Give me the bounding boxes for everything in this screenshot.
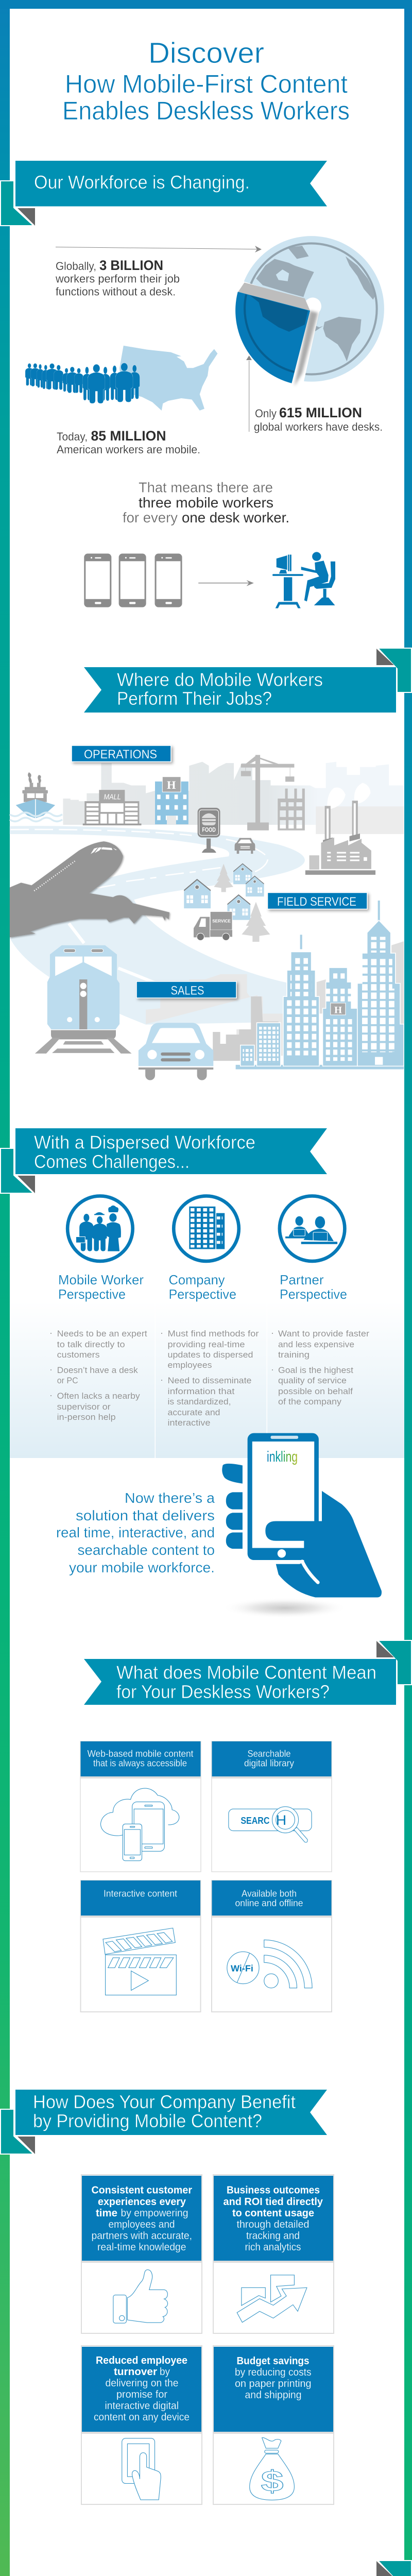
- text: three mobile workers: one desk worker.: [182, 510, 289, 526]
- ribbon: With a Dispersed Workforce: With a Dispersed Workforce: [34, 1131, 255, 1153]
- icon: food sign: [198, 808, 220, 853]
- icon: mall: [83, 790, 141, 825]
- card: reduced employee turnover: content on any device: [94, 2412, 190, 2423]
- card: interactive content: Interactive content: [104, 1889, 177, 1899]
- text: company bullets: employees: [168, 1360, 212, 1370]
- text: solution statement: your mobile workforce.: [69, 1560, 215, 1575]
- icon: skyscrapers: [236, 901, 404, 1070]
- card: business outcomes and ROI: and ROI tied directly: [224, 2196, 323, 2208]
- text: 85 million: 85 MILLION: [91, 428, 166, 444]
- heading: partner perspective: [280, 1272, 347, 1302]
- card: available online and offline: Wi-Fi: [231, 1963, 253, 1974]
- text: mobile worker bullets: to talk directly to: [57, 1340, 125, 1349]
- card: reduced employee turnover: turnover: [114, 2366, 157, 2378]
- ribbon: What does Mobile Content Mean: for Your Deskless Workers?: [116, 1681, 330, 1702]
- card: business outcomes and ROI: through detailed: [237, 2219, 309, 2230]
- text: 3 billion workers: Globally,: [56, 260, 96, 273]
- text: mobile worker bullets: [50, 1329, 147, 1422]
- text: 615 million: global workers have desks.: [254, 420, 383, 433]
- illustration: where mobile workers perform jobs: [10, 755, 404, 1025]
- card: budget savings: Budget savings: [237, 2355, 309, 2367]
- city skyline backdrop: [63, 762, 404, 834]
- text: partner bullets: training: [278, 1350, 310, 1360]
- text: 3 billion workers: 3 BILLION: [99, 258, 163, 273]
- text: 85 million: American workers are mobile.: [57, 443, 200, 456]
- card: searchable digital library: [212, 1741, 332, 1872]
- icon: airplane: [10, 841, 169, 937]
- card: business outcomes and ROI: rich analytics: [245, 2242, 301, 2253]
- card: web-based mobile content: Web-based mobile content: [88, 1749, 194, 1759]
- arrow: up to globe: [246, 355, 252, 432]
- icon: hotel: H: [167, 778, 176, 791]
- card: searchable digital library: Searchable: [247, 1749, 290, 1759]
- shadow under hand: [222, 1598, 348, 1618]
- icon: mall: MALL: [104, 793, 121, 802]
- icon: ship: [10, 772, 62, 821]
- text: solution statement: Now there’s a: [125, 1490, 215, 1506]
- label: OPERATIONS: OPERATIONS: [84, 748, 157, 761]
- card: consistent customer experiences: by empowering: [121, 2208, 188, 2219]
- card: reduced employee turnover: by: [160, 2366, 170, 2378]
- text: solution statement: real time, interactive, and: [56, 1524, 215, 1540]
- icon: three phones, arrow, desk worker: [84, 552, 335, 608]
- ribbon: Where do Mobile Workers Perform Their Jobs: Perform Their Jobs?: [117, 688, 272, 709]
- card: consistent customer experiences: experiences every: [98, 2196, 186, 2208]
- card: consistent customer experiences: [81, 2175, 202, 2333]
- text: company bullets: providing real-time: [168, 1340, 245, 1349]
- ribbon: Where do Mobile Workers Perform Their Jobs: [84, 648, 411, 713]
- label: SALES: [136, 981, 236, 998]
- card: business outcomes and ROI: Business outcomes: [227, 2184, 320, 2196]
- text: 85 million: Today,: [57, 430, 88, 443]
- icon: company circle: [174, 1196, 239, 1261]
- card: reduced employee turnover: promise for: [116, 2389, 167, 2400]
- icons: houses and trees: [184, 863, 270, 942]
- title: Enables Deskless Workers: [62, 96, 350, 125]
- text: partner bullets: of the company: [278, 1397, 342, 1406]
- text: 3 billion workers: [55, 258, 180, 298]
- text: solution statement: [56, 1490, 215, 1575]
- ribbon: How Does Your Company Benefit: by Providing Mobile Content?: [33, 2110, 262, 2131]
- icon: small car: [235, 838, 255, 854]
- icon: factory: [305, 801, 375, 875]
- text: mobile worker bullets: Doesn’t have a desk: [57, 1365, 138, 1375]
- card: budget savings: by reducing costs: [235, 2367, 311, 2378]
- label: OPERATIONS: [72, 745, 171, 761]
- heading: partner perspective: Partner: [280, 1272, 324, 1287]
- card: business outcomes and ROI: to content usage: [232, 2208, 314, 2219]
- card: reduced employee turnover: [81, 2346, 202, 2504]
- icon: hand holding phone with inkling: inkling: [267, 1449, 298, 1465]
- card: available online and offline: [212, 1880, 332, 2012]
- arrow: to globe: [56, 246, 262, 252]
- ribbon: With a Dispersed Workforce: [1, 1128, 327, 1193]
- text: partner bullets: [272, 1329, 369, 1406]
- heading: mobile worker perspective: [58, 1272, 144, 1302]
- text: partner bullets: Goal is the highest: [278, 1365, 353, 1375]
- text: solution statement: solution that delivers: [76, 1507, 215, 1523]
- text: mobile worker bullets: Often lacks a nearby: [57, 1391, 140, 1401]
- text: 615 million: 615 MILLION: [279, 405, 362, 420]
- text: company bullets: interactive: [168, 1418, 210, 1428]
- text: partner bullets: quality of service: [278, 1376, 347, 1385]
- heading: company perspective: Company: [169, 1272, 225, 1287]
- text: 85 million: [57, 428, 200, 456]
- text: mobile worker bullets: Needs to be an expert: [57, 1329, 147, 1338]
- ribbon: With a Dispersed Workforce: Comes Challenges...: [34, 1151, 190, 1172]
- card: searchable digital library: digital library: [244, 1758, 294, 1769]
- icon: hotel: [155, 777, 188, 824]
- text: company bullets: Need to disseminate: [168, 1376, 251, 1385]
- card: web-based mobile content: [80, 1741, 201, 1872]
- US map with people: [25, 346, 217, 411]
- text: 3 billion workers: workers perform their job: [55, 272, 180, 285]
- title: [62, 37, 350, 125]
- text: 615 million: [254, 405, 383, 433]
- heading: company perspective: Perspective: [169, 1286, 236, 1302]
- text: mobile worker bullets: in-person help: [57, 1412, 116, 1422]
- icon: building frame: [278, 789, 305, 831]
- text: company bullets: [161, 1329, 259, 1428]
- ribbon: How Does Your Company Benefit: [1, 2090, 327, 2154]
- text: company bullets: accurate and: [168, 1408, 220, 1417]
- heading: mobile worker perspective: Perspective: [58, 1286, 126, 1302]
- text: company bullets: updates to dispersed: [168, 1350, 253, 1360]
- text: partner bullets: possible on behalf: [278, 1386, 353, 1396]
- title: How Mobile-First Content: [65, 70, 348, 98]
- card: consistent customer experiences: partners with accurate,: [92, 2230, 192, 2242]
- card: available online and offline: online and offline: [235, 1898, 303, 1908]
- icon: train: [35, 945, 132, 1054]
- ribbon: How Does Your Company Benefit: How Does Your Company Benefit: [33, 2091, 296, 2112]
- icon: car: [139, 1023, 213, 1080]
- icon: partner circle: [280, 1196, 345, 1261]
- text: solution statement: searchable content to: [77, 1542, 215, 1558]
- heading: partner perspective: Perspective: [280, 1286, 347, 1302]
- ribbon: What does Mobile Content Mean: [84, 1640, 411, 1705]
- card: budget savings: [213, 2346, 334, 2504]
- card: available online and offline: Available both: [242, 1889, 297, 1899]
- icon: food sign: FOOD: [202, 826, 216, 833]
- text: mobile worker bullets: supervisor or: [57, 1402, 111, 1412]
- ribbon: What does Mobile Content Mean: What does Mobile Content Mean: [116, 1662, 376, 1683]
- panel: perspectives background: [10, 1301, 404, 1458]
- icon: skyscrapers: H: [334, 1005, 342, 1015]
- card: searchable digital library: H: [276, 1812, 286, 1828]
- card: budget savings: on paper printing: [235, 2378, 311, 2389]
- text: company bullets: is standardized,: [168, 1397, 231, 1406]
- card: consistent customer experiences: Consistent customer: [92, 2184, 192, 2196]
- card: reduced employee turnover: Reduced employee: [96, 2355, 187, 2366]
- text: three mobile workers: for every: [123, 510, 178, 526]
- card: budget savings: and shipping: [245, 2389, 302, 2401]
- text: three mobile workers: That means there are: [139, 479, 273, 496]
- globe with desk-worker wedge: [231, 236, 384, 389]
- text: mobile worker bullets: customers: [57, 1350, 100, 1360]
- text: three mobile workers: three mobile workers: [139, 495, 273, 511]
- icon: service truck: [194, 911, 232, 941]
- card: budget savings: $: [261, 2465, 284, 2498]
- text: three mobile workers: [123, 479, 289, 526]
- card: business outcomes and ROI: [213, 2175, 334, 2333]
- icon: crane: [241, 755, 294, 831]
- card: web-based mobile content: that is always accessible: [93, 1758, 187, 1769]
- text: partner bullets: and less expensive: [278, 1340, 354, 1349]
- shadows under icons: [46, 621, 362, 641]
- illustration: lower scene: [10, 838, 404, 1080]
- ribbon: Our Workforce is Changing: [1, 161, 327, 226]
- text: company bullets: Must find methods for: [168, 1329, 259, 1338]
- card: searchable digital library: SEARC: [241, 1815, 269, 1826]
- smoke and back haze: [316, 783, 404, 834]
- icon: mobile worker circle: [67, 1196, 133, 1261]
- label: SALES: SALES: [171, 984, 204, 997]
- heading: company perspective: [169, 1272, 236, 1302]
- card: interactive content: [80, 1880, 201, 2012]
- card: consistent customer experiences: time: [96, 2208, 117, 2219]
- card: consistent customer experiences: real-time knowledge: [97, 2242, 186, 2253]
- road: [10, 826, 305, 1025]
- card: consistent customer experiences: employees and: [108, 2219, 175, 2230]
- card: reduced employee turnover: interactive digital: [105, 2400, 179, 2412]
- card: business outcomes and ROI: tracking and: [246, 2230, 300, 2242]
- heading: mobile worker perspective: Mobile Worker: [58, 1272, 144, 1287]
- ribbon: Our Workforce is Changing: Our Workforce is Changing.: [34, 172, 250, 193]
- icon: hand holding phone with inkling: [222, 1433, 382, 1598]
- text: mobile worker bullets: or PC: [57, 1376, 78, 1385]
- text: partner bullets: Want to provide faster: [278, 1329, 369, 1338]
- ribbon: The Bottom Line: [84, 2561, 411, 2576]
- icon: service truck: SERVICE: [212, 919, 231, 923]
- card: reduced employee turnover: delivering on the: [105, 2378, 178, 2389]
- text: company bullets: information that: [168, 1386, 235, 1396]
- label: FIELD SERVICE: FIELD SERVICE: [277, 895, 356, 909]
- text: 615 million: Only: [255, 407, 277, 420]
- grey city behind skyscrapers: [146, 974, 284, 1061]
- title: Discover: [148, 37, 264, 70]
- ribbon: Where do Mobile Workers Perform Their Jobs: Where do Mobile Workers: [117, 669, 323, 690]
- text: 3 billion workers: functions without a desk.: [56, 285, 176, 298]
